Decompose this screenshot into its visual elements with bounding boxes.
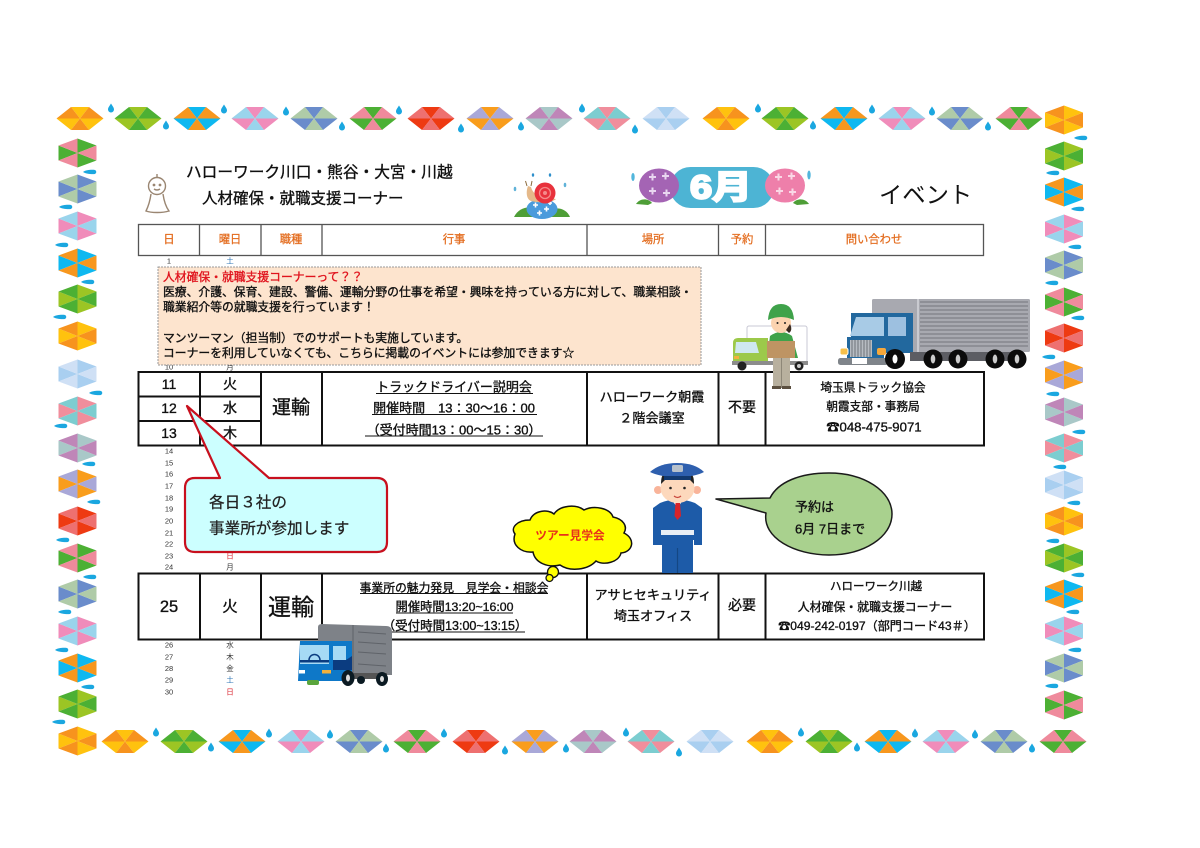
date list: bottom: 27 xyxy=(165,652,173,662)
table header xyxy=(138,224,984,256)
date list: middle: 日 xyxy=(226,552,234,560)
table row: workplace tour, 25: 必要 xyxy=(728,597,756,613)
date list: bottom: 28 xyxy=(165,664,173,673)
table row: workplace tour, 25: 25 xyxy=(160,598,178,616)
illustration: delivery worker holding a box xyxy=(767,304,798,389)
date list: top: 月 xyxy=(226,362,234,372)
callout: three companies each day: 事業所が参加します xyxy=(209,520,349,538)
callout: three companies each day: 各日３社の xyxy=(209,494,287,512)
speech bubble: reservations until June 7 xyxy=(716,473,892,555)
date list: bottom xyxy=(165,640,234,696)
table header: 場所 xyxy=(642,232,664,246)
speech cloud: tour xyxy=(513,506,632,582)
table header: 日 xyxy=(163,234,175,246)
date list: middle: 22 xyxy=(165,540,173,548)
table row: workplace tour, 25: 事業所の魅力発見 見学会・相談会 xyxy=(360,581,549,595)
badge: June with hydrangeas: 6月 xyxy=(690,168,752,206)
table row: workplace tour, 25: 開催時間13:20~16:00 xyxy=(396,600,514,614)
panel: about the corner: マンツーマン（担当制）でのサポートも実施しています。 xyxy=(163,331,468,345)
table header: 予約 xyxy=(731,232,753,246)
icon: snail on hydrangea xyxy=(514,173,570,219)
date list: bottom: 26 xyxy=(165,640,173,650)
border: left column of umbrellas and raindrops xyxy=(52,138,102,756)
illustration: security guard xyxy=(650,463,704,573)
border: top row of umbrellas and raindrops xyxy=(56,104,1042,134)
panel: about the corner xyxy=(158,267,701,365)
table row: truck driver session, 11-13: （受付時間13：00〜15：30） xyxy=(367,422,541,438)
table row: truck driver session, 11-13: 13 xyxy=(161,425,177,441)
date list: bottom: 日 xyxy=(226,688,234,696)
date list: bottom: 29 xyxy=(165,676,173,684)
date list: middle: 24 xyxy=(165,562,173,572)
table row: workplace tour, 25: 運輸 xyxy=(268,594,314,620)
table row: truck driver session, 11-13: 不要 xyxy=(728,399,756,415)
table row: truck driver session, 11-13: 朝霞支部・事務局 xyxy=(826,400,920,414)
date list: top: 10 xyxy=(165,362,173,372)
date list: bottom: 金 xyxy=(226,663,234,673)
illustration: small green delivery truck xyxy=(732,326,808,370)
heading: event: イベント xyxy=(879,182,972,208)
table row: workplace tour, 25: アサヒセキュリティ xyxy=(594,588,712,602)
title xyxy=(186,164,453,208)
panel: about the corner: 人材確保・就職支援コーナーって？？ xyxy=(163,270,363,284)
title: ハローワーク川口・熊谷・大宮・川越 xyxy=(186,164,453,182)
table row: truck driver session, 11-13: 水 xyxy=(223,400,237,416)
date list: top: 1 xyxy=(167,256,171,266)
table row: truck driver session, 11-13: 木 xyxy=(223,425,237,441)
date list: top xyxy=(165,256,234,372)
table row: truck driver session, 11-13: 運輸 xyxy=(272,396,310,418)
table row: truck driver session, 11-13: 埼玉県トラック協会 xyxy=(820,380,926,394)
date list: middle: 月 xyxy=(226,562,234,572)
illustration: large blue semi truck xyxy=(838,299,1030,369)
table row: workplace tour, 25: 火 xyxy=(222,598,238,616)
table header: 曜日 xyxy=(219,233,241,246)
speech cloud: tour: ツアー見学会 xyxy=(535,528,605,542)
table row: truck driver session, 11-13: ☎048-475-9071 xyxy=(826,420,922,434)
date list: middle: 21 xyxy=(165,528,173,538)
date list: middle: 19 xyxy=(165,504,173,514)
title: 人材確保・就職支援コーナー xyxy=(202,190,404,208)
panel: about the corner: 医療、介護、保育、建設、警備、運輸分野の仕事を希望・興味を持っている方に対して、職業相談・ xyxy=(163,285,692,299)
table row: truck driver session, 11-13: 火 xyxy=(223,376,237,392)
date list: middle: 16 xyxy=(165,470,173,478)
date list: middle: 14 xyxy=(165,446,173,456)
date list: bottom: 30 xyxy=(165,688,173,696)
panel: about the corner: 職業紹介等の就職支援を行っています！ xyxy=(163,300,375,314)
date list: top: 土 xyxy=(226,256,234,266)
border: right column of umbrellas and raindrops xyxy=(1042,106,1087,720)
table row: truck driver session, 11-13: ２階会議室 xyxy=(619,410,685,426)
table row: truck driver session, 11-13: 開催時間 13：30〜16：00 xyxy=(373,400,535,416)
table header: 職種 xyxy=(280,232,302,246)
table header: 問い合わせ xyxy=(846,233,902,246)
date list: middle xyxy=(165,446,234,572)
date list: middle: 17 xyxy=(165,482,173,490)
date list: bottom: 木 xyxy=(226,652,234,662)
speech bubble: reservations until June 7: 6月 7日まで xyxy=(795,522,865,536)
date list: bottom: 水 xyxy=(226,640,234,650)
table row: truck driver session, 11-13: 12 xyxy=(161,400,177,416)
border: bottom row of umbrellas and raindrops xyxy=(102,728,1086,756)
callout: three companies each day xyxy=(185,406,387,552)
table header: 行事 xyxy=(443,233,465,246)
table row: workplace tour, 25: 人材確保・就職支援コーナー xyxy=(798,600,952,614)
panel: about the corner: コーナーを利用していなくても、こちらに掲載のイベントには参加できます☆ xyxy=(163,346,574,360)
badge: June with hydrangeas xyxy=(631,167,811,208)
illustration: small blue truck xyxy=(298,624,392,686)
table row: truck driver session, 11-13: トラックドライバー説明会 xyxy=(376,380,532,394)
table row: truck driver session, 11-13: 11 xyxy=(162,376,176,392)
table row: workplace tour, 25: 埼玉オフィス xyxy=(614,608,692,624)
date list: middle: 20 xyxy=(165,516,173,526)
table row: workplace tour, 25: ハローワーク川越 xyxy=(830,579,922,593)
table row: workplace tour, 25 xyxy=(138,574,984,640)
table row: truck driver session, 11-13 xyxy=(138,372,984,446)
icon: teru teru bozu xyxy=(146,174,169,212)
table row: workplace tour, 25: （受付時間13:00~13:15） xyxy=(383,619,527,633)
table row: workplace tour, 25: ☎049-242-0197（部門コード43＃） xyxy=(778,619,976,633)
date list: middle: 18 xyxy=(165,494,173,502)
date list: bottom: 土 xyxy=(226,674,234,684)
table row: truck driver session, 11-13: ハローワーク朝霞 xyxy=(600,390,704,404)
speech bubble: reservations until June 7: 予約は xyxy=(795,500,834,514)
date list: middle: 23 xyxy=(165,552,173,560)
date list: middle: 15 xyxy=(165,458,173,468)
